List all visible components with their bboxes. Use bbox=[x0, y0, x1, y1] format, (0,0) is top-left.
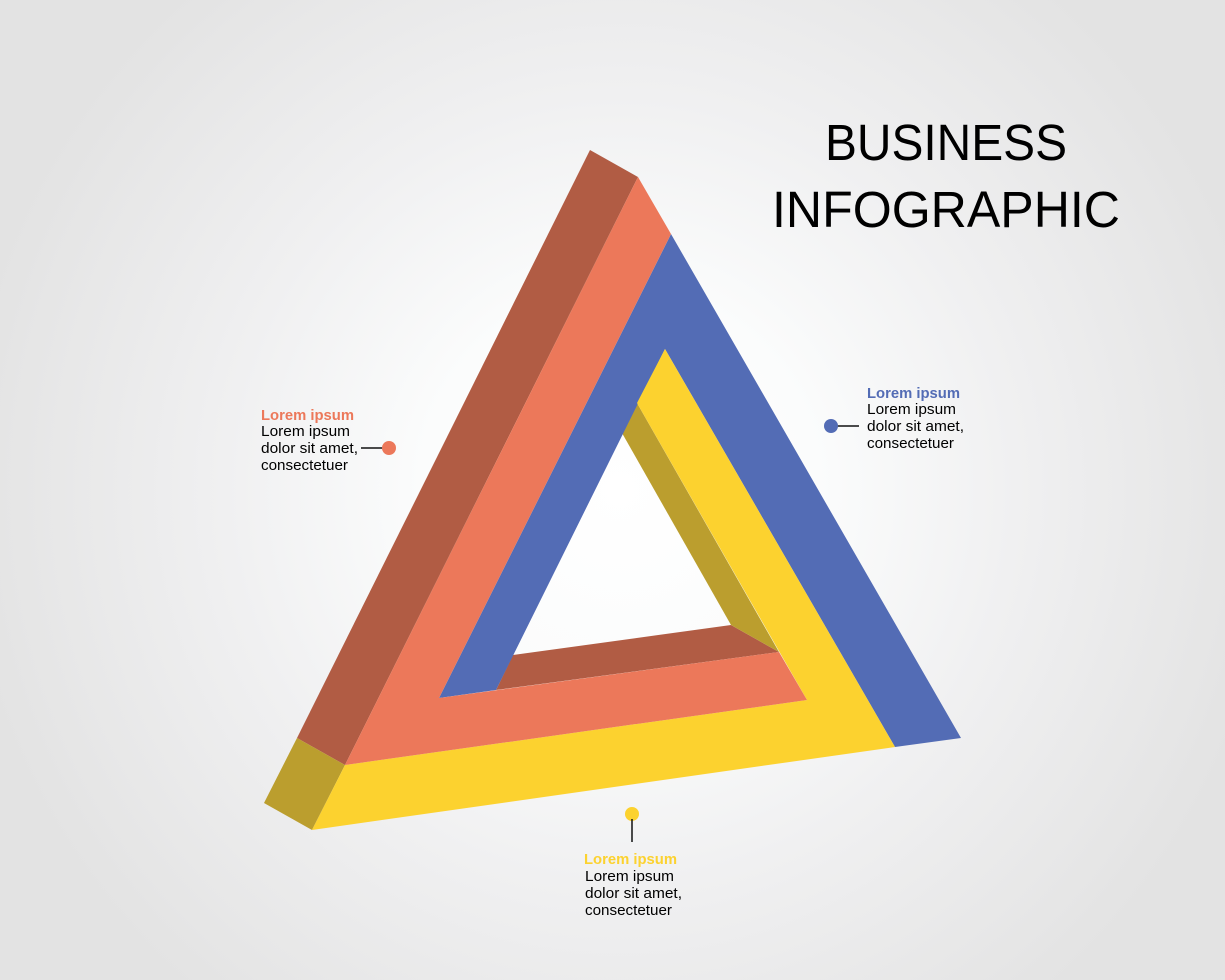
orange dot bbox=[382, 441, 396, 455]
yellow callout text: dolor sit amet, bbox=[585, 885, 682, 902]
yellow callout text bbox=[585, 868, 682, 919]
callout: yellow bbox=[584, 807, 682, 919]
blue callout text bbox=[867, 401, 964, 452]
orange callout text: consectetuer bbox=[261, 457, 348, 474]
title bbox=[772, 114, 1120, 238]
orange band bbox=[345, 177, 807, 765]
orange callout text: dolor sit amet, bbox=[261, 440, 358, 457]
callout: orange bbox=[261, 408, 396, 474]
orange callout text bbox=[261, 423, 358, 474]
blue band bbox=[439, 234, 961, 747]
blue callout heading: Lorem ipsum bbox=[867, 386, 960, 402]
orange connector bbox=[361, 447, 384, 449]
blue callout text: Lorem ipsum bbox=[867, 401, 956, 418]
yellow band bbox=[312, 349, 895, 830]
yellow dot bbox=[625, 807, 639, 821]
lower-left end face, dark yellow bbox=[264, 738, 345, 830]
orange callout text: Lorem ipsum bbox=[261, 423, 350, 440]
title: INFOGRAPHIC bbox=[772, 181, 1120, 238]
orange callout heading: Lorem ipsum bbox=[261, 408, 354, 424]
yellow callout heading: Lorem ipsum bbox=[584, 852, 677, 868]
yellow callout text: consectetuer bbox=[585, 902, 672, 919]
inner right face, dark yellow bbox=[622, 403, 779, 652]
inner bottom face, dark red bbox=[496, 625, 779, 690]
callout: blue bbox=[824, 386, 964, 452]
yellow connector bbox=[631, 819, 633, 842]
left outer side face, dark red bbox=[297, 150, 638, 765]
blue callout text: dolor sit amet, bbox=[867, 418, 964, 435]
impossible triangle bbox=[264, 150, 961, 830]
yellow callout text: Lorem ipsum bbox=[585, 868, 674, 885]
title: BUSINESS bbox=[825, 114, 1067, 171]
blue callout text: consectetuer bbox=[867, 435, 954, 452]
blue connector bbox=[836, 425, 859, 427]
blue dot bbox=[824, 419, 838, 433]
